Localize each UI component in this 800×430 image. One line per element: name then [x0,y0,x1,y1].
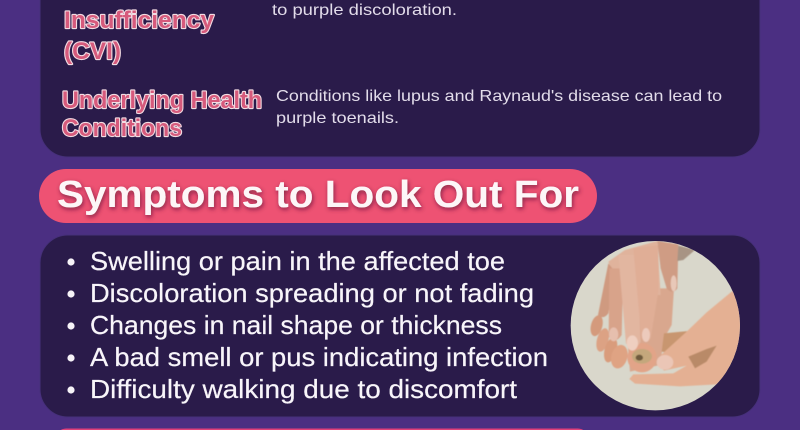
upper hand back [608,241,661,295]
text: underlying conditions description [276,88,722,127]
fingers [598,264,612,318]
foot and toes [627,288,674,372]
panel: causes [40,0,760,157]
next section heading pill [56,428,588,430]
symptoms list: A bad smell or pus indicating infection [90,342,548,372]
heading: Underlying Health Conditions: Underlying Health [62,87,262,114]
text: underlying conditions description: purple toenails. [276,110,399,127]
text: underlying conditions description: Conditions like lupus and Raynaud's disease can lead to [276,88,722,105]
photo: hands examining toenail [567,238,747,415]
heading pill: symptoms: Symptoms to Look Out For [57,174,579,216]
lower hand [629,288,747,386]
toenail [632,349,652,364]
symptoms list [67,246,548,404]
heading: Chronic Venous Insufficiency: Insufficiency [64,7,215,34]
heading pill: symptoms [39,169,597,223]
text: CVI description: to purple discoloration. [272,2,457,19]
symptoms list: Changes in nail shape or thickness [90,310,502,340]
finger behind lower hand [661,330,688,352]
symptoms list: Discoloration spreading or not fading [90,278,534,308]
heading: Underlying Health Conditions [62,87,262,142]
fingernails [627,335,638,351]
symptoms list: Difficulty walking due to discomfort [90,374,518,404]
symptoms list: Swelling or pain in the affected toe [90,246,505,276]
panel: symptoms [40,235,760,417]
heading: Chronic Venous Insufficiency: (CVI) [64,38,121,65]
heading: Chronic Venous Insufficiency [64,7,215,65]
heading: Underlying Health Conditions: Conditions [62,115,182,142]
